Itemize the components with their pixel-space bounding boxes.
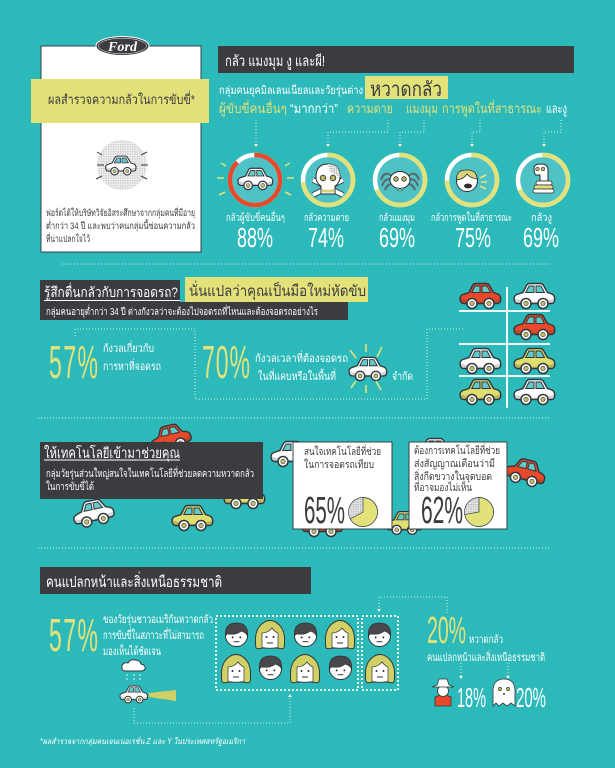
intro body text: ที่น่าแปลกใจไว้ <box>46 232 90 245</box>
parking lot graphic <box>459 284 555 408</box>
card: parking assist 65%: สนใจเทคโนโลยีที่ช่วย <box>304 444 381 458</box>
intro body text <box>46 206 195 245</box>
fears intro text: แมงมุม <box>406 101 438 117</box>
icon: ghost 20% <box>493 679 546 713</box>
parking heading: กลุ่มคนอายุต่ำกว่า 34 ปี ต่างกังวลว่าจะต้องไปจอดรถที่ไหนและต้องจอดรถอย่างไร <box>46 304 318 318</box>
faces group: 20% respondents <box>362 616 398 690</box>
strangers heading <box>40 567 311 594</box>
card: parking assist 65%: 65% <box>304 490 345 532</box>
stat: 57% finding parking: การหาที่จอดรถ <box>103 358 161 373</box>
stat: 57% low visibility: การขับขี่ในสภาวะที่ไม่สามารถ <box>103 627 204 642</box>
intro body text: ต่ำกว่า 34 ปี และพบว่าคนกลุ่มนี้ซ่อนความกลัว <box>46 219 195 232</box>
stat: 70% tight spaces: กังวลเวลาที่ต้องจอดรถ <box>255 350 348 365</box>
stat: 20% strangers and supernatural <box>427 610 545 679</box>
stat: 70% tight spaces: จำกัด <box>392 371 413 383</box>
icon: stranger with hat 18% <box>432 679 486 713</box>
pie chart: 65% <box>348 498 378 526</box>
fears intro text: การพูดในที่สาธารณะ <box>442 100 542 117</box>
panel: technology heading: ให้เทคโนโลยีเข้ามาช่วยคุณ <box>44 444 180 462</box>
faces group: 57% respondents <box>216 616 358 690</box>
stat: 70% tight spaces: ในที่แคบหรือในพื้นที่ <box>258 368 336 383</box>
ring: fear of snakes 69% <box>518 155 568 205</box>
yellow title band: ผลสำรวจความกลัวในการขับขี่* <box>48 91 195 107</box>
ring: fear of public speaking 75% <box>447 155 497 205</box>
stat: 57% finding parking: 57% <box>49 336 98 388</box>
fears intro text: และงู <box>546 101 567 117</box>
footnote: *ผลสำรวจจากกลุ่มคนเจนเนอเรชั่น Z และ Y ในประเทศสหรัฐอเมริกา <box>40 735 245 747</box>
stat: 57% low visibility: 57% <box>49 609 98 661</box>
ring labels and percentages: กลัวผู้ขับขี่คนอื่นๆ <box>226 210 285 224</box>
icon: ghost 20%: 20% <box>516 682 546 713</box>
panel: fears heading <box>218 46 574 73</box>
icon: car in grey circle <box>96 140 148 190</box>
stat: 70% tight spaces <box>202 336 413 393</box>
Ford logo: Ford <box>107 40 138 55</box>
ring: fear of death 74% <box>303 155 353 205</box>
icon: car in rain with headlight <box>120 660 176 703</box>
ring labels and percentages: 75% <box>455 222 491 253</box>
icon: stranger with hat 18%: 18% <box>457 682 486 713</box>
stat: 57% low visibility <box>49 609 213 661</box>
card: blind spot warning 62%: ส่งสัญญาณเตือนว่ามี <box>414 457 495 470</box>
card: parking assist 65%: ในการจอดรถเทียบ <box>304 458 374 471</box>
dotted connector: parking stats <box>75 329 465 399</box>
stat: 57% finding parking <box>49 336 161 388</box>
fears intro text: ความตาย <box>347 101 393 116</box>
fears intro text: หวาดกลัว <box>370 79 442 101</box>
stat: 57% low visibility: ของวัยรุ่นชาวอเมริกันหวาดกลัว <box>103 613 213 626</box>
card: parking assist 65% <box>293 442 392 532</box>
stat: 70% tight spaces: 70% <box>202 336 250 388</box>
stat: 20% strangers and supernatural: 20% <box>427 610 466 652</box>
card: blind spot warning 62%: 62% <box>421 490 463 532</box>
ring labels and percentages: กลัวความตาย <box>304 212 349 224</box>
technology section cars <box>71 421 548 536</box>
parking heading: นั่นแปลว่าคุณเป็นมือใหม่หัดขับ <box>189 280 366 301</box>
pie chart: 62% <box>464 498 494 526</box>
fears intro text: ผู้ขับขี่คนอื่นๆ <box>219 100 287 117</box>
arrows: faces connectors <box>134 597 447 723</box>
stat: 20% strangers and supernatural: คนแปลกหน้าและสิ่งเหนือธรรมชาติ <box>427 649 545 664</box>
ring labels and percentages <box>226 210 559 253</box>
Ford logo <box>96 36 149 56</box>
panel: fears heading: กลัว แมงมุม งู และผี! <box>225 53 325 71</box>
yellow title band <box>31 79 209 123</box>
fears intro text: “มากกว่า” <box>290 101 338 116</box>
parking heading: รู้สึกตื่นกลัวกับการจอดรถ? <box>44 283 178 301</box>
panel: technology heading <box>40 442 263 499</box>
card: blind spot warning 62% <box>409 442 507 532</box>
ring labels and percentages: 88% <box>237 222 273 253</box>
arrows: text to rings <box>254 120 561 147</box>
card: blind spot warning 62%: ต้องการเทคโนโลยีที่ช่วย <box>414 443 500 457</box>
panel: survey intro card <box>31 36 209 252</box>
stat: 57% low visibility: มองเห็นได้ชัดเจน <box>103 643 161 658</box>
fears intro text <box>219 76 567 117</box>
icon: car with rays <box>349 344 387 393</box>
card: blind spot warning 62%: ที่อาจมองไม่เห็น <box>414 480 472 494</box>
ring labels and percentages: กลัวงู <box>531 212 552 224</box>
stat: 57% finding parking: กังวลเกี่ยวกับ <box>103 340 154 355</box>
strangers heading: คนแปลกหน้าและสิ่งเหนือธรรมชาติ <box>46 571 222 591</box>
ring labels and percentages: 74% <box>308 222 344 253</box>
parking heading <box>40 277 368 320</box>
ring labels and percentages: 69% <box>523 222 559 253</box>
panel: technology heading: ในการขับขี่ได้ <box>46 479 94 493</box>
ring: fear of spiders 69% <box>375 155 425 205</box>
ring labels and percentages: กลัวแมงมุม <box>379 212 415 224</box>
card: blind spot warning 62%: สิ่งกีดขวางในจุดบอด <box>414 469 492 483</box>
ring labels and percentages: 69% <box>379 222 415 253</box>
intro body text: ฟอร์ดได้ให้บริษัทวิจัยอิสระศึกษาจากกลุ่มคนที่มีอายุ <box>46 206 195 219</box>
panel: technology heading: กลุ่มวัยรุ่นส่วนใหญ่สนใจในเทคโนโลยีที่ช่วยลดความหวาดกลัว <box>46 466 254 480</box>
ring labels and percentages: กลัวการพูดในที่สาธารณะ <box>431 210 512 224</box>
stat: 20% strangers and supernatural: หวาดกลัว <box>469 634 503 646</box>
fears intro text: กลุ่มคนยุคมิลเลนเนียลและวัยรุ่นต่าง <box>219 84 363 97</box>
ring: fear of other drivers 88% <box>217 155 294 205</box>
